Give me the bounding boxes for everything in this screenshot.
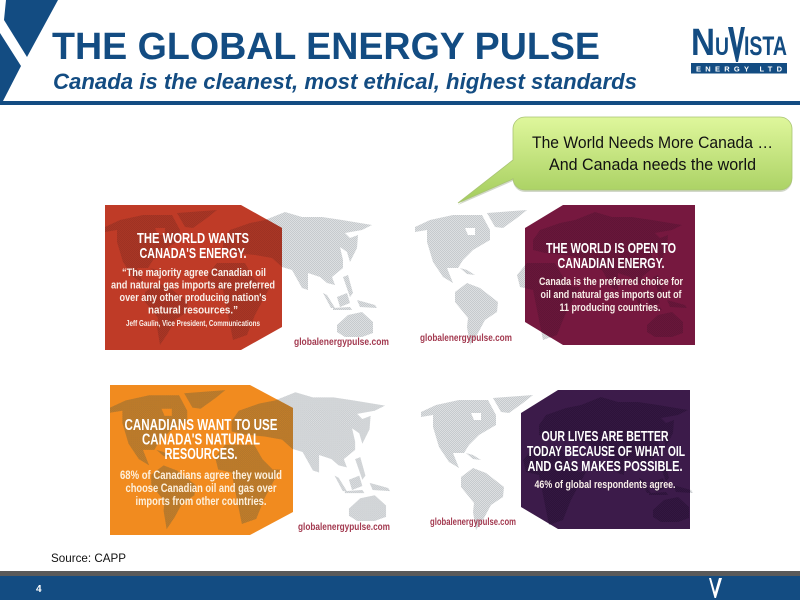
panel: Canadians want to use Canada's natural resources: 68% of Canadians agree they would <box>120 470 282 482</box>
NuVista logo: U <box>715 33 729 61</box>
panel: Canadians want to use Canada's natural resources: imports from other countries. <box>136 496 266 508</box>
header rule <box>0 101 800 105</box>
panel: the world is open to Canadian energy: 11 producing countries. <box>560 302 660 314</box>
panel: our lives are better: 46% of global respondents agree. <box>534 479 676 491</box>
footer bar <box>0 571 800 600</box>
callout: The World Needs More Canada: And Canada needs the world <box>549 156 756 174</box>
panel: the world wants Canada's energy: globalenergypulse.com <box>294 336 389 348</box>
panel: the world is open to Canadian energy: Canada is the preferred choice for <box>539 276 684 288</box>
panel: the world is open to Canadian energy: THE WORLD IS OPEN TO <box>546 240 676 257</box>
footer V icon <box>709 578 722 598</box>
panel: the world is open to Canadian energy: CANADIAN ENERGY. <box>558 255 664 272</box>
NuVista logo: N <box>691 22 715 64</box>
panel: the world is open to Canadian energy <box>415 205 695 345</box>
callout: The World Needs More Canada <box>458 117 792 205</box>
page number: 4 <box>36 584 42 595</box>
panel: Canadians want to use Canada's natural resources <box>110 385 390 535</box>
panel: the world is open to Canadian energy: globalenergypulse.com <box>420 332 512 344</box>
panel: the world wants Canada's energy: Jeff Gaulin, Vice President, Communications <box>126 319 260 328</box>
panel: our lives are better <box>421 390 693 530</box>
panel: our lives are better: AND GAS MAKES POSSIBLE. <box>528 458 682 475</box>
panel: Canadians want to use Canada's natural resources: RESOURCES. <box>164 446 238 463</box>
NuVista logo: ENERGY LTD <box>696 64 783 74</box>
panel: Canadians want to use Canada's natural resources: CANADA'S NATURAL <box>142 432 260 448</box>
panel: Canadians want to use Canada's natural resources: globalenergypulse.com <box>298 521 390 533</box>
panel: the world wants Canada's energy: natural resources.” <box>148 304 238 316</box>
callout: The World Needs More Canada: The World Needs More Canada … <box>532 134 773 152</box>
panel: Canadians want to use Canada's natural resources: CANADIANS WANT TO USE <box>124 417 278 434</box>
panel: the world is open to Canadian energy: oil and natural gas imports out of <box>540 289 682 301</box>
panel: our lives are better: OUR LIVES ARE BETTER <box>542 428 669 445</box>
corner chevron logo mark <box>0 0 58 101</box>
subtitle: Canada is the cleanest, most ethical, highest standards <box>53 69 637 94</box>
title: THE GLOBAL ENERGY PULSE <box>52 26 600 68</box>
panel: the world wants Canada's energy: CANADA'S ENERGY. <box>140 245 246 262</box>
panel: the world wants Canada's energy: and natural gas imports are preferred <box>111 280 275 292</box>
source note: Source: CAPP <box>51 551 126 565</box>
panel: the world wants Canada's energy: over any other producing nation's <box>120 292 266 304</box>
panel: our lives are better: globalenergypulse.com <box>430 516 516 528</box>
panel: our lives are better: TODAY BECAUSE OF WHAT OIL <box>527 443 685 460</box>
panel: the world wants Canada's energy: “The majority agree Canadian oil <box>122 267 266 279</box>
panel: the world wants Canada's energy <box>105 205 389 350</box>
panel: Canadians want to use Canada's natural resources: choose Canadian oil and gas over <box>126 483 277 495</box>
panel: the world wants Canada's energy: THE WORLD WANTS <box>137 230 249 247</box>
NuVista logo <box>691 22 787 74</box>
